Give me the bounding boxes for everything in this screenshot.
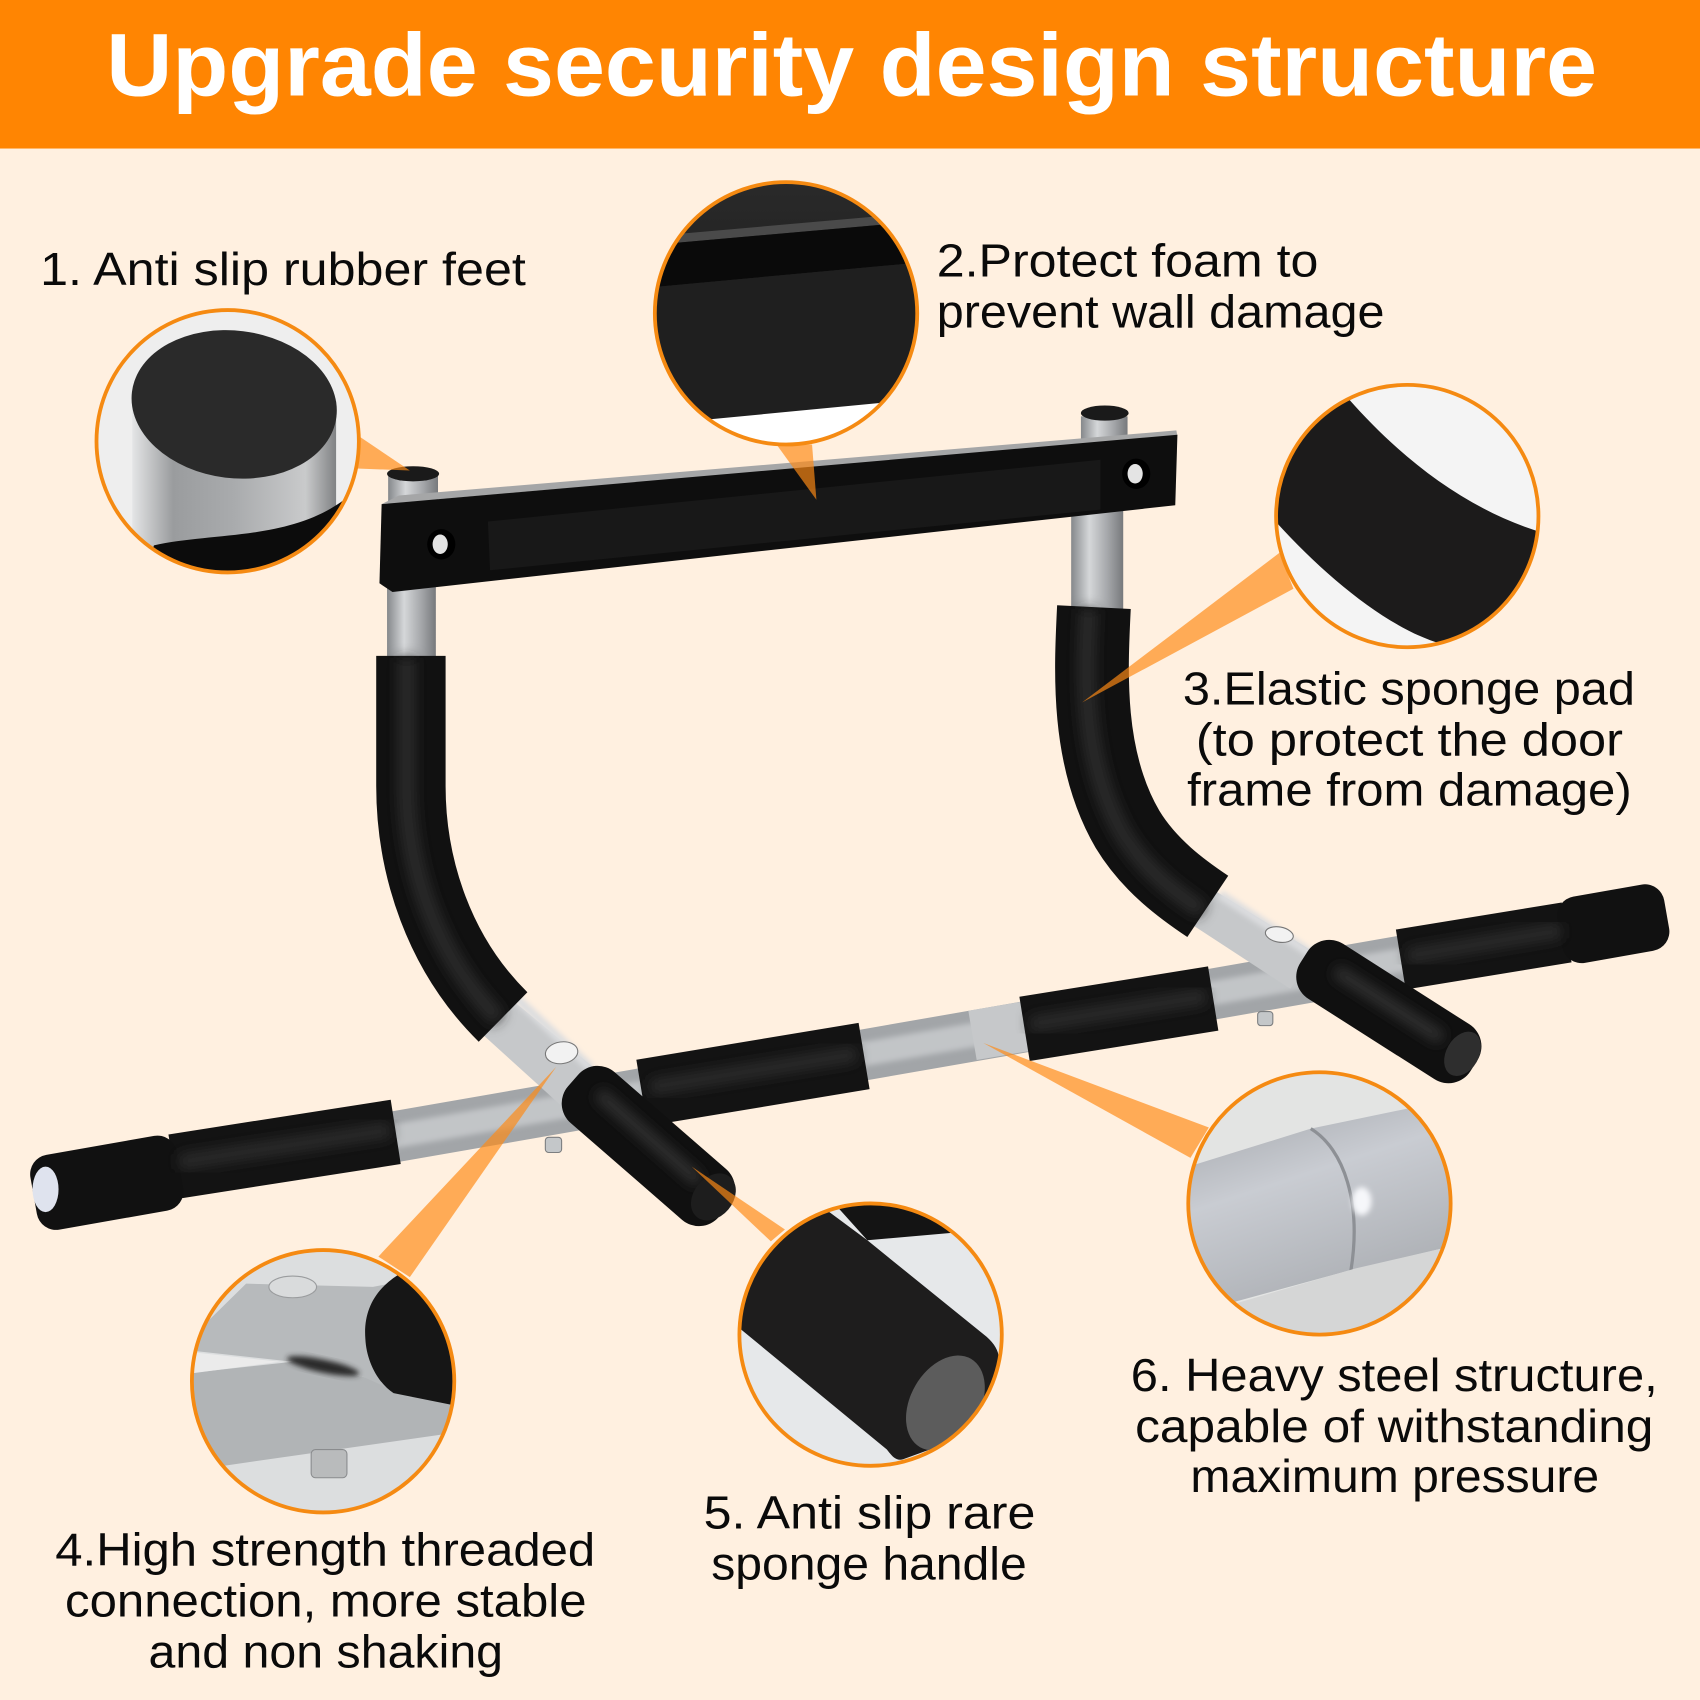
right foam tube	[1087, 607, 1208, 911]
detail circle 5: sponge handle	[732, 1198, 1014, 1474]
label 6: maximum pressure	[1190, 1450, 1599, 1502]
label 3: frame from damage)	[1187, 764, 1632, 816]
label 6: capable of withstanding	[1135, 1400, 1653, 1452]
top door bracket	[379, 430, 1177, 592]
right handle grip	[1286, 930, 1491, 1093]
label 5	[704, 1487, 1035, 1590]
product: pull-up bar	[27, 405, 1672, 1237]
right cross steel tube	[1187, 889, 1317, 989]
upper tube	[198, 1284, 386, 1382]
detail circle 6: steel structure	[1182, 1068, 1458, 1344]
right end cap	[1554, 881, 1672, 966]
detail circle 1: rubber foot	[92, 309, 369, 585]
lower tube	[194, 1362, 450, 1466]
label 4: 4.High strength threaded	[55, 1524, 595, 1576]
main steel bar	[369, 953, 1442, 1141]
label 4: and non shaking	[149, 1625, 503, 1677]
bar end cap	[33, 1167, 59, 1212]
label 6	[1131, 1349, 1658, 1502]
label 3	[1183, 663, 1635, 816]
label 2: prevent wall damage	[937, 285, 1385, 337]
detail circle 3: sponge pad	[1268, 379, 1550, 656]
pointer 2	[777, 445, 816, 500]
foam grips on main bar	[27, 881, 1672, 1233]
bright gap	[194, 1353, 278, 1373]
right post	[1071, 405, 1129, 613]
title banner	[0, 0, 1700, 149]
label 3: 3.Elastic sponge pad	[1183, 663, 1635, 715]
pointer 6	[983, 1043, 1209, 1158]
label 3: (to protect the door	[1196, 714, 1623, 766]
label 2	[937, 234, 1385, 337]
pointer 3	[1082, 553, 1293, 703]
left foam tube	[407, 656, 503, 1019]
bolts under the bar	[545, 1012, 1273, 1152]
label 4: connection, more stable	[65, 1575, 587, 1627]
label 4	[55, 1524, 595, 1677]
title: Upgrade security design structure	[106, 15, 1597, 114]
label 1: 1. Anti slip rubber feet	[40, 243, 526, 295]
detail circle 4: threaded connection	[184, 1247, 466, 1518]
pointer 1	[353, 437, 410, 471]
pointer 5	[692, 1167, 785, 1241]
pointer 4	[378, 1067, 556, 1277]
detail circle 2: protective foam	[651, 179, 922, 450]
label 2: 2.Protect foam to	[937, 234, 1318, 286]
left end cap	[27, 1132, 187, 1233]
left handle grip	[551, 1055, 746, 1237]
label 5: sponge handle	[711, 1538, 1027, 1590]
left post	[387, 466, 439, 661]
pointer arrows	[353, 437, 1293, 1277]
label 6: 6. Heavy steel structure,	[1131, 1349, 1658, 1401]
left cross steel tube	[472, 989, 594, 1108]
label 5: 5. Anti slip rare	[704, 1487, 1035, 1539]
